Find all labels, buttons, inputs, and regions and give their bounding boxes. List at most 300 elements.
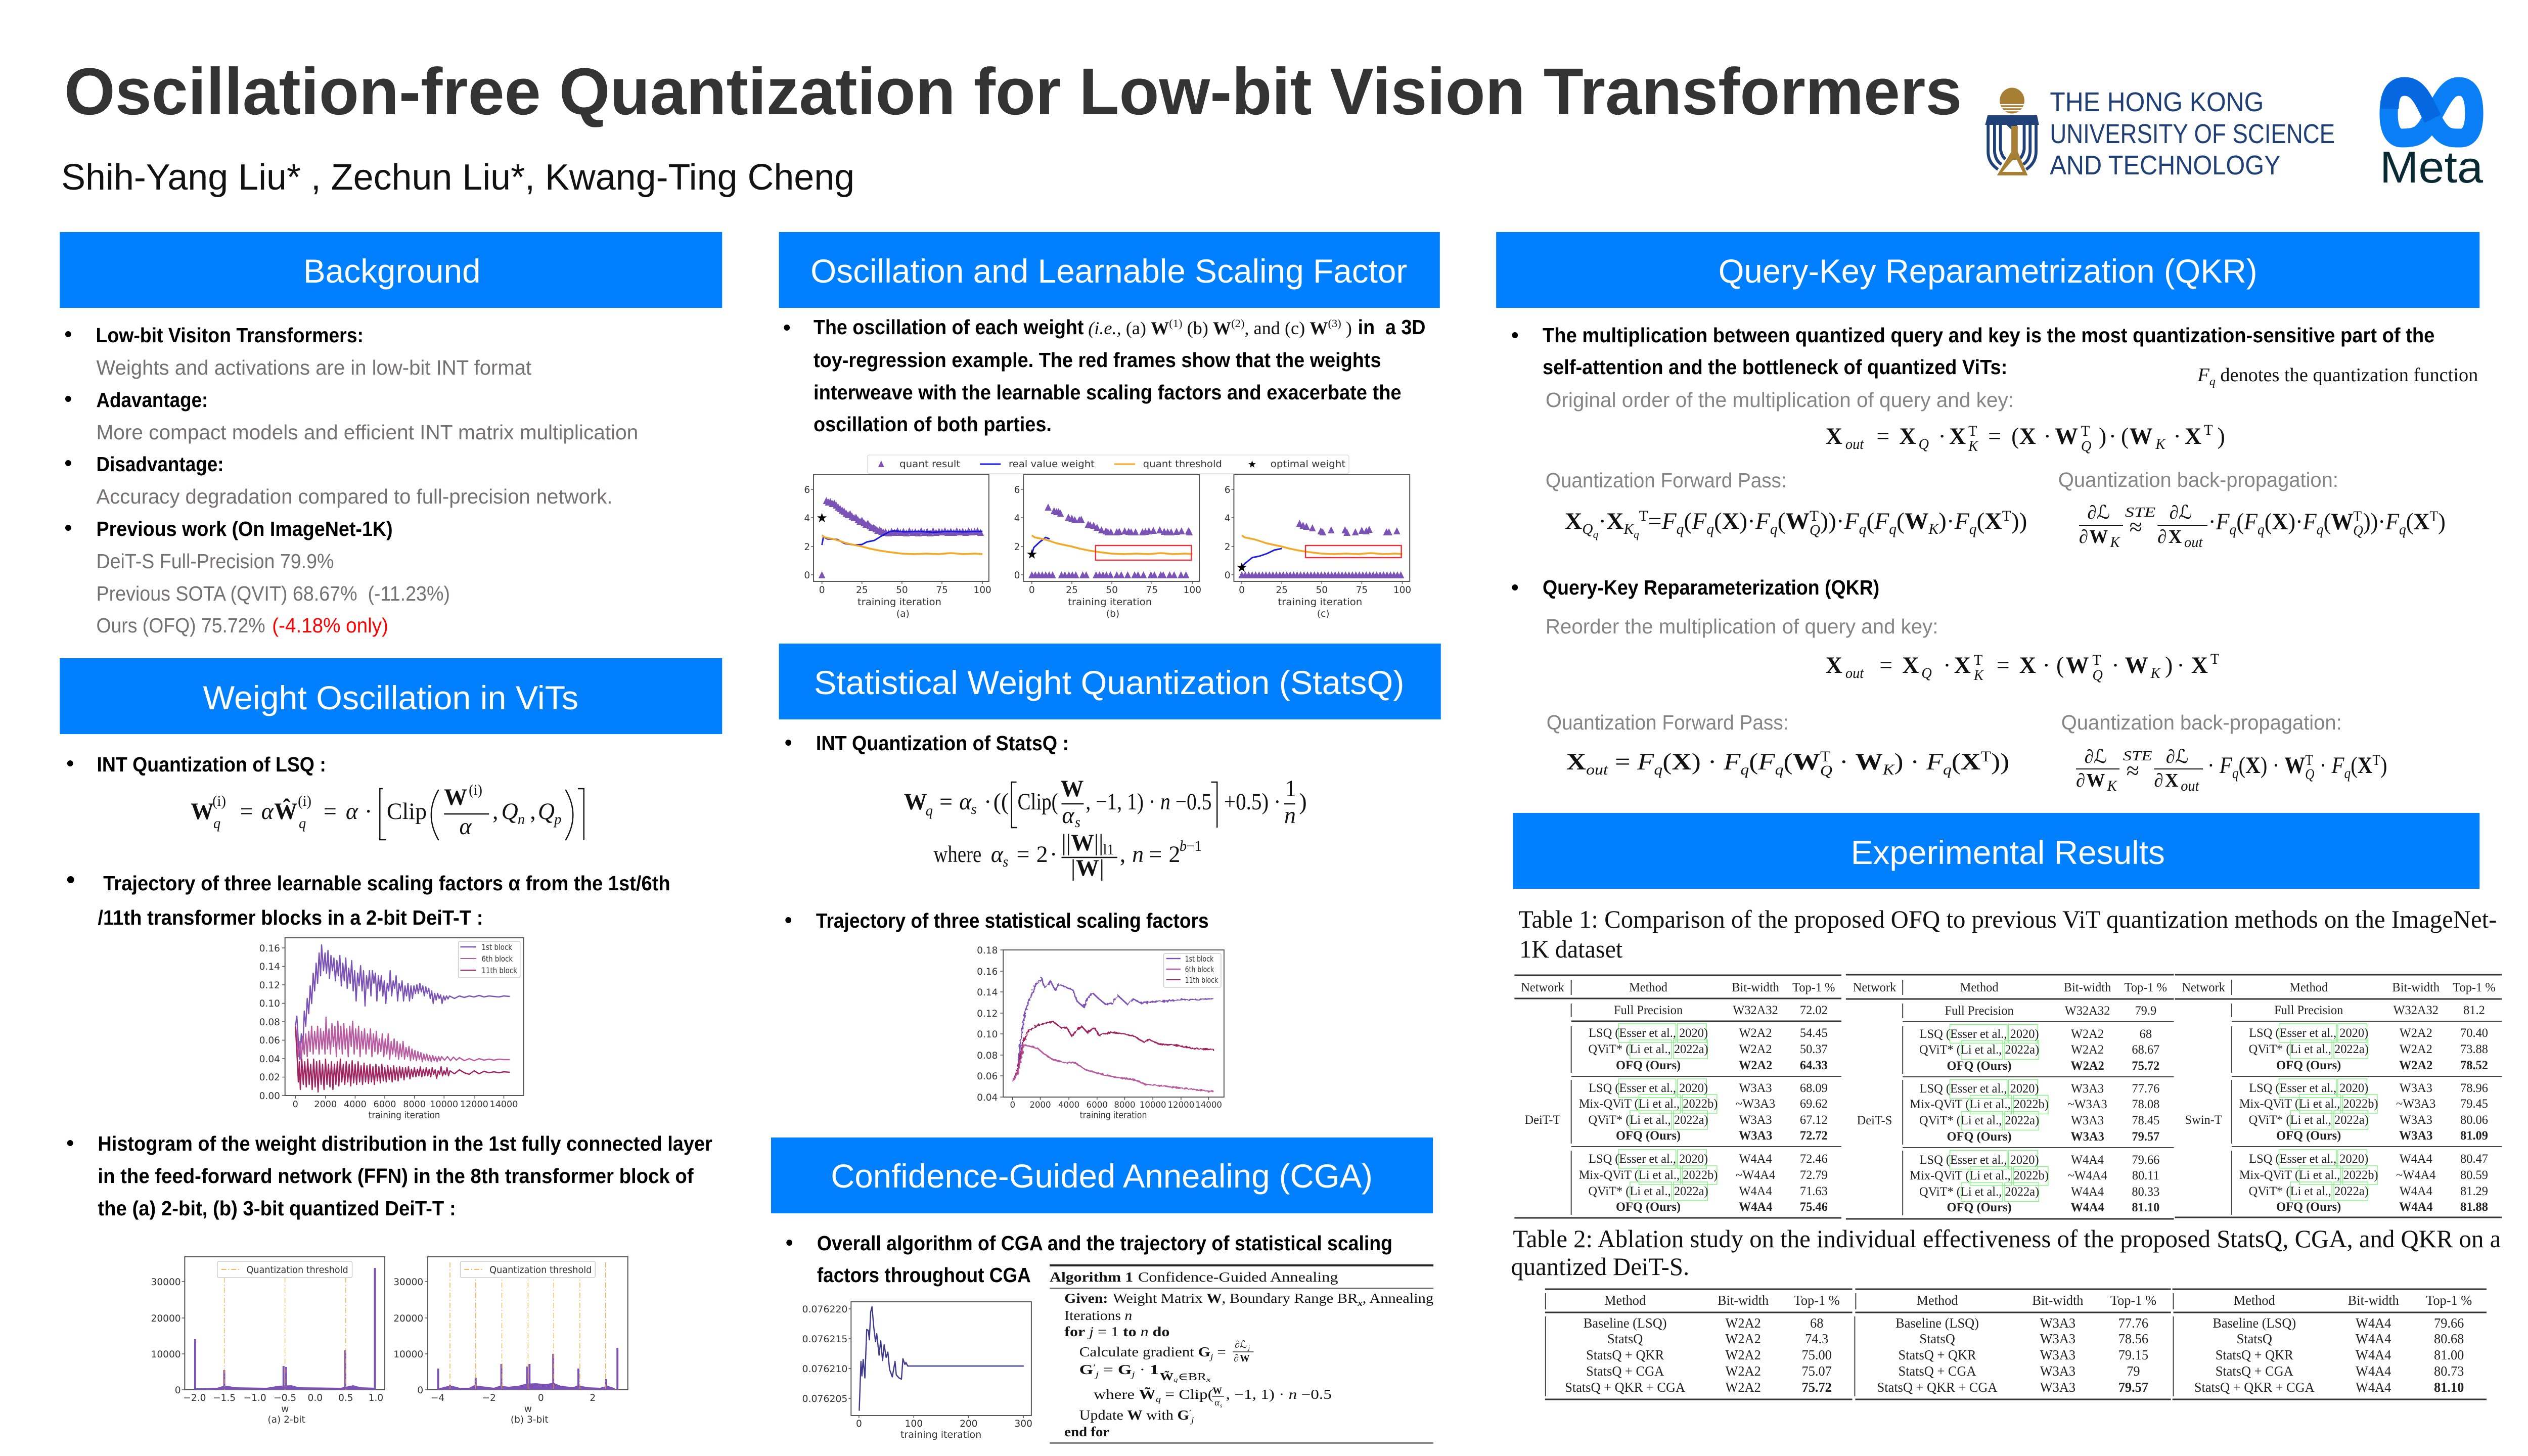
table 1: DeiT-T: Mix-QViT (Li et al., 2022b) (1579, 1168, 1718, 1182)
algorithm box: for j = 1 to n do (1064, 1324, 1169, 1339)
equation: LSQ quantization: p (553, 811, 561, 828)
histogram: 2-bit: −0.5 (274, 1393, 296, 1403)
histogram: 2-bit: 0 (175, 1385, 181, 1396)
heading (771, 1138, 1433, 1213)
line chart: learnable scaling factors: 4000 (344, 1099, 367, 1110)
table 2: 4-bit: StatsQ + CGA (2216, 1363, 2294, 1379)
equation: forward pass: F (1954, 509, 1969, 534)
bullet list (65, 324, 638, 637)
bullet text: ) (1341, 318, 1352, 338)
equation: reordered: W (2066, 653, 2089, 678)
equation: LSQ quantization: · (365, 799, 372, 825)
table 1 caption: Table 1: Comparison of the proposed OFQ to previous ViT quantization methods on the ImageNet- (1518, 905, 2497, 933)
panel: query-key reparametrization (1496, 232, 2479, 794)
table 1: DeiT-S: 78.08 (2132, 1098, 2159, 1111)
table 1: DeiT-S: LSQ (Esser et al., 2020) (1920, 1082, 2039, 1096)
legend: 6th block (1185, 965, 1214, 974)
line chart: CGA trajectory: 0.076210 (802, 1364, 847, 1375)
equation: reordered back-propagation: out (2181, 778, 2200, 794)
equation: reordered forward pass: q (1943, 762, 1952, 778)
table 1: DeiT-S: ~W3A3 (2067, 1098, 2107, 1111)
equation: forward pass: T (1810, 508, 1819, 524)
chart: toy regression (b): training iteration (1068, 597, 1152, 608)
legend: 11th block (482, 966, 518, 975)
chart: toy regression (b): ★ (1026, 547, 1037, 562)
equation: reordered back-propagation: ∂ (2076, 770, 2085, 791)
algorithm box: j (1247, 1344, 1250, 1351)
table 2: 4-bit: StatsQ (2237, 1331, 2272, 1346)
table 1: Swin-T: W32A32 (2393, 1004, 2439, 1017)
equation: reordered: X (2191, 653, 2208, 678)
equation: LSQ quantization: = (324, 799, 337, 825)
line chart: statistical scaling factors: 10000 (1140, 1100, 1166, 1110)
legend: toy regression: quant threshold (1143, 459, 1222, 470)
line chart: learnable scaling factors: 0.04 (259, 1054, 280, 1065)
equation: forward pass: X (1565, 509, 1582, 534)
table 1: Swin-T: 81.88 (2460, 1200, 2488, 1214)
table 1: Swin-T: QViT* (Li et al., 2022a) (2249, 1042, 2369, 1056)
equation: reordered: K (2150, 665, 2161, 681)
legend: toy regression: quant result (899, 459, 960, 470)
heading (60, 658, 722, 734)
equation: StatsQ: l1 (1103, 842, 1114, 858)
equation: reordered forward pass: q (1654, 762, 1662, 778)
algorithm box (1050, 1265, 1433, 1443)
equation: StatsQ: | (1071, 855, 1075, 881)
equation: reordered forward pass: ( (1749, 749, 1758, 775)
histogram: 3-bit: 2 (590, 1393, 596, 1403)
histogram: 2-bit: 30000 (151, 1277, 181, 1288)
chart: toy regression (c): 75 (1356, 585, 1368, 596)
line chart: CGA trajectory: 0 (856, 1419, 862, 1429)
line chart: learnable scaling factors: 0.08 (259, 1017, 280, 1028)
table 1: DeiT-S: W4A4 (2070, 1201, 2104, 1214)
equation: original order: · (2109, 424, 2116, 449)
equation: StatsQ: 1 (1285, 776, 1296, 802)
chart: toy regression (c): 2 (1225, 542, 1231, 553)
panel: background (60, 232, 722, 637)
table 1: Swin-T: OFQ (Ours) (2276, 1059, 2341, 1072)
chart: toy regression (c): 4 (1225, 513, 1231, 524)
algorithm box: q (1173, 1376, 1178, 1383)
table 1: DeiT-S: Bit-width (2064, 981, 2111, 994)
table 1: DeiT-S: Mix-QViT (Li et al., 2022b) (1910, 1098, 2049, 1111)
panel: weight oscillation (60, 658, 722, 1425)
equation: forward pass: ( (1684, 509, 1692, 534)
equation: back-propagation: W (2331, 509, 2353, 535)
algorithm box: Calculate gradient G (1079, 1344, 1208, 1359)
chart: toy regression (c): 0 (1239, 585, 1245, 596)
equation: reordered back-propagation: q (2232, 765, 2239, 782)
line chart: learnable scaling factors: 8000 (403, 1099, 426, 1110)
table 1: DeiT-T: QViT* (Li et al., 2022a) (1588, 1113, 1708, 1127)
table 1: Swin-T: QViT* (Li et al., 2022a) (2249, 1113, 2369, 1127)
text: back-propagation label: Quantization back-propagation: (2061, 711, 2342, 734)
algorithm box: 1 (1150, 1362, 1159, 1377)
table 1: Swin-T: Bit-width (2392, 981, 2440, 994)
equation: StatsQ: s (1075, 814, 1080, 831)
table 1: DeiT-T: OFQ (Ours) (1616, 1200, 1681, 1214)
equation: forward pass: q (1770, 521, 1778, 537)
equation: reordered back-propagation: ( (2351, 753, 2358, 779)
chart: toy regression (b): 0 (1014, 570, 1020, 581)
equation: LSQ quantization: = (240, 799, 253, 825)
line chart: statistical scaling factors: 0.14 (977, 987, 998, 998)
bullet list: Adavantage: (97, 388, 208, 412)
table 2: 2-bit: W2A2 (1725, 1363, 1761, 1379)
bullet text: multiplication (1512, 324, 2434, 379)
equation: forward pass: Q (1810, 522, 1820, 538)
table 2: 3-bit: StatsQ + QKR + CGA (1877, 1380, 1998, 1395)
equation: back-propagation: ≈ (2130, 515, 2142, 540)
table 2: 4-bit: 80.73 (2434, 1363, 2464, 1379)
equation: reordered forward pass: out (1586, 762, 1608, 778)
equation: reordered back-propagation: ) (2380, 753, 2387, 779)
equation: forward pass: F (1874, 509, 1889, 534)
equation: reordered back-propagation: W (2087, 770, 2105, 791)
equation: back-propagation: ·F (2208, 509, 2230, 535)
equation: original order: = (1876, 424, 1889, 449)
logo text: Meta (2380, 143, 2484, 192)
chart: toy regression (c): (c) (1317, 609, 1330, 619)
title: Oscillation-free Quantization for Low-bit Vision Transformers (64, 55, 1962, 128)
equation: reordered back-propagation: T (2372, 752, 2380, 768)
line chart: learnable scaling factors: 0.06 (259, 1035, 280, 1046)
equation: reordered forward pass: F (1637, 749, 1654, 775)
equation: reordered: · (1943, 653, 1951, 678)
equation: StatsQ: | (1100, 855, 1104, 881)
equation: reordered back-propagation: ∂ (2154, 770, 2163, 791)
table 1: DeiT-S: W4A4 (2071, 1185, 2104, 1199)
table 1: Swin-T: OFQ (Ours) (2276, 1129, 2341, 1143)
table 1: Swin-T (2175, 975, 2502, 1217)
line chart: statistical scaling factors: 0.12 (977, 1009, 998, 1019)
table 1: DeiT-S: W3A3 (2071, 1114, 2104, 1127)
equation: LSQ quantization: (i) (212, 793, 226, 809)
equation: reordered: ) (2165, 653, 2173, 678)
bullet: StatsQ: INT Quantization of StatsQ : (816, 732, 1069, 755)
bullet list: Disadvantage: (97, 452, 224, 476)
table 1: DeiT-T: OFQ (Ours) (1616, 1059, 1681, 1072)
line chart: learnable scaling factors (259, 938, 524, 1121)
table 2 caption (1511, 1224, 2501, 1281)
bullet text: multiplication: self-attention and the bottleneck of quantized ViTs: (1543, 355, 2007, 379)
bullet text: W (1310, 318, 1328, 338)
line chart: CGA trajectory: training iteration (900, 1430, 981, 1440)
bullet text (784, 315, 1425, 436)
table 1: DeiT-T: Network (1521, 981, 1564, 994)
table 1: DeiT-T: W32A32 (1733, 1004, 1778, 1017)
bullet text: oscillation of both parties. (814, 413, 1052, 436)
table 2: 3-bit: 77.76 (2118, 1315, 2148, 1331)
table 2: 3-bit: 79.57 (2118, 1380, 2148, 1395)
equation: forward pass: q (1706, 521, 1714, 537)
bullet: trajectory of learnable scaling factors: Trajectory of three learnable scaling factors α from the 1st/6th (103, 872, 670, 895)
histogram: 2-bit: −1.5 (213, 1393, 236, 1403)
chart: toy regression (a) (804, 475, 991, 619)
equation: forward pass: q (1889, 521, 1897, 537)
histogram: 3-bit: 30000 (393, 1277, 423, 1288)
equation: reordered: · (2177, 653, 2185, 678)
equation: back-propagation: STE (2125, 505, 2155, 520)
equation: reordered forward pass: X (1566, 749, 1586, 775)
equation: back-propagation: F (2385, 509, 2400, 535)
line chart: learnable scaling factors: 0.14 (259, 962, 280, 972)
bullet text: Overall algorithm of CGA and the trajectory of statistical scaling (817, 1232, 1392, 1255)
table 1: Swin-T: W3A3 (2400, 1113, 2432, 1127)
equation: back-propagation: ∂ℒ (2088, 503, 2110, 523)
table 2: 3-bit: Baseline (LSQ) (1895, 1315, 1979, 1331)
equation: reordered forward pass: T (1820, 749, 1831, 765)
equation: reordered back-propagation: X (2358, 753, 2372, 779)
equation: forward pass: q (1677, 521, 1684, 537)
legend: Quantization threshold (246, 1265, 348, 1276)
equation: reordered forward pass: = (1608, 749, 1637, 775)
panel: confidence-guided annealing (771, 1138, 1433, 1443)
equation: back-propagation (2079, 503, 2446, 551)
table 1: Swin-T: ~W3A3 (2396, 1097, 2435, 1111)
algorithm box: s (1220, 1402, 1223, 1409)
table 1: DeiT-S: LSQ (Esser et al., 2020) (1920, 1153, 2039, 1167)
equation: StatsQ: +0.5) · (1224, 789, 1281, 815)
chart: toy regression (c): 25 (1276, 585, 1288, 596)
table 1: Swin-T: ~W4A4 (2396, 1168, 2435, 1182)
equation: reordered: ( (2056, 653, 2064, 678)
table 2: 4-bit: StatsQ + QKR (2216, 1347, 2293, 1362)
table 1: DeiT-T: 50.37 (1800, 1042, 1828, 1056)
algorithm box: , Annealing (1363, 1291, 1433, 1306)
table 2: 2-bit: StatsQ + CGA (1586, 1363, 1664, 1379)
equation: LSQ quantization: W (444, 785, 467, 810)
histogram: 3-bit: −2 (482, 1393, 496, 1403)
algorithm box: x (1206, 1376, 1211, 1383)
table 2: 2-bit: StatsQ (1607, 1331, 1643, 1346)
equation: reordered back-propagation: · F (2207, 753, 2234, 779)
heading (60, 232, 722, 308)
table 2: 3-bit: W3A3 (2040, 1331, 2075, 1346)
table 2: 4-bit: 81.00 (2434, 1347, 2464, 1362)
bullet text: , and (c) (1244, 318, 1310, 338)
equation: back-propagation: K (2110, 534, 2120, 551)
equation: original order: W (2055, 424, 2078, 449)
line chart: learnable scaling factors: 0 (293, 1099, 298, 1110)
table 1: Swin-T: 80.47 (2460, 1152, 2488, 1166)
equation: reordered back-propagation: K (2107, 778, 2117, 794)
equation: reordered: · (2043, 653, 2050, 678)
equation: LSQ quantization: Ŵ (274, 798, 297, 825)
line chart: statistical scaling factors: 0.10 (977, 1029, 998, 1040)
table 1: Swin-T: Mix-QViT (Li et al., 2022b) (2239, 1097, 2378, 1111)
table 2: 2-bit: Baseline (LSQ) (1584, 1315, 1667, 1331)
line chart: learnable scaling factors: 6000 (374, 1099, 396, 1110)
equation: StatsQ: b (1180, 838, 1187, 854)
table 2: 4-bit: StatsQ + QKR + CGA (2194, 1380, 2315, 1395)
equation: reordered forward pass: ( (1952, 749, 1961, 775)
table 1: Swin-T: W4A4 (2400, 1152, 2432, 1166)
line chart: statistical scaling factors: 0.16 (977, 967, 998, 977)
table 1: DeiT-S: W4A4 (2071, 1153, 2104, 1167)
equation: reordered: X (2019, 653, 2036, 678)
bullet text: factors throughout CGA (817, 1263, 1031, 1287)
equation: original order: T (2081, 423, 2090, 439)
equation: reordered forward pass: F (1926, 749, 1944, 775)
table 1: DeiT-S: 80.11 (2132, 1169, 2159, 1182)
authors: Shih-Yang Liu* , Zechun Liu*, Kwang-Ting Cheng (61, 157, 854, 198)
algorithm box: G (1079, 1362, 1094, 1377)
equation: back-propagation: ∂ (2157, 527, 2166, 548)
line chart: statistical scaling factors: 4000 (1058, 1100, 1079, 1110)
histogram: 3-bit: 20000 (393, 1313, 423, 1324)
equation: forward pass: F (1661, 509, 1677, 534)
chart: toy regression (b): 100 (1184, 585, 1201, 596)
table 2: 4-bit: Method (2234, 1293, 2275, 1308)
equation: back-propagation: q (2317, 522, 2323, 538)
table 1: DeiT-T: 64.33 (1800, 1059, 1828, 1072)
bullet list: More compact models and efficient INT matrix multiplication (97, 421, 638, 444)
table 1: DeiT-S: W32A32 (2065, 1004, 2110, 1018)
bullet list: Previous SOTA (QVIT) 68.67% (-11.23%) (97, 582, 450, 605)
table 1: DeiT-T: 75.46 (1800, 1200, 1828, 1214)
equation: reordered back-propagation: ∂ℒ (2085, 747, 2107, 767)
equation: reordered back-propagation: Q (2305, 766, 2315, 783)
table 2: 3-bit: 78.56 (2118, 1331, 2148, 1346)
equation: forward pass: X (1606, 509, 1623, 534)
equation: reordered forward pass: X) · F (1672, 749, 1738, 775)
algorithm box: where W̃ (1094, 1387, 1152, 1402)
line chart: CGA trajectory: 200 (960, 1419, 977, 1429)
algorithm box: Algorithm 1 (1050, 1269, 1133, 1285)
table 1: Swin-T: W2A2 (2400, 1042, 2432, 1056)
equation: back-propagation: Q (2353, 523, 2363, 539)
table 2: 3-bit: W3A3 (2040, 1380, 2075, 1395)
equation: original order: Q (1918, 436, 1929, 452)
equation: LSQ quantization: α (346, 799, 359, 825)
equation: StatsQ: W (1076, 855, 1099, 881)
equation: StatsQ: · (984, 789, 991, 815)
table 2: 4-bit: W4A4 (2356, 1315, 2391, 1331)
table 1: DeiT-S: W3A3 (2070, 1130, 2104, 1144)
legend: toy regression: optimal weight (1271, 459, 1345, 470)
legend (217, 1261, 352, 1278)
algorithm box: j (1209, 1352, 1213, 1361)
line chart: learnable scaling factors: 0.02 (259, 1072, 280, 1083)
equation: back-propagation: ))· (2363, 509, 2385, 535)
bullet list: Previous work (On ImageNet-1K) (97, 517, 393, 540)
table 1: Swin-T: 70.40 (2460, 1026, 2488, 1040)
chart: toy regression (a): 0 (804, 570, 810, 581)
table 1: DeiT-S: Mix-QViT (Li et al., 2022b) (1910, 1169, 2049, 1182)
table 1: DeiT-T: LSQ (Esser et al., 2020) (1589, 1152, 1708, 1166)
table 1: DeiT-T: Mix-QViT (Li et al., 2022b) (1579, 1097, 1718, 1111)
equation: back-propagation: ( (2323, 509, 2331, 535)
table 1: DeiT-S: 68.67 (2132, 1043, 2159, 1057)
algorithm box: = (1099, 1362, 1118, 1377)
heading: Confidence-Guided Annealing (CGA) (831, 1157, 1373, 1195)
equation: forward pass: )· (1938, 509, 1955, 534)
bullet list: Weights and activations are in low-bit INT format (97, 356, 531, 379)
line chart: statistical scaling factors: 0 (1010, 1100, 1015, 1110)
table 2: 2-bit: 68 (1810, 1315, 1823, 1331)
bullet text: (1) (1169, 317, 1183, 330)
equation: back-propagation: W (2089, 527, 2108, 548)
histogram: 3-bit: −4 (431, 1393, 444, 1403)
equation: forward pass: ( (1977, 509, 1984, 534)
table 2: 3-bit: StatsQ (1919, 1331, 1955, 1346)
text: forward pass label: Quantization Forward Pass: (1547, 711, 1789, 734)
equation: forward pass: T (1639, 508, 1648, 524)
table 2: 4-bit: W4A4 (2356, 1331, 2391, 1346)
equation: reordered: Q (1921, 665, 1932, 681)
equation: StatsQ: , (1120, 842, 1125, 868)
table 2: 2-bit: W2A2 (1725, 1331, 1761, 1346)
equation: StatsQ: || (1061, 830, 1071, 856)
algorithm box: j (1131, 1370, 1135, 1379)
equation: reordered back-propagation (2076, 747, 2387, 794)
equation: reordered back-propagation: T (2305, 752, 2313, 768)
equation: forward pass: = (1648, 509, 1662, 534)
bullet list: DeiT-S Full-Precision 79.9% (97, 550, 334, 573)
bullet list: Ours (OFQ) 75.72% (97, 614, 265, 637)
chart: toy regression (c): 6 (1225, 485, 1231, 495)
chart: toy regression (c): 100 (1393, 585, 1411, 596)
histogram: 3-bit: 0 (417, 1385, 423, 1396)
table 1: Swin-T: 80.59 (2460, 1168, 2488, 1182)
equation: StatsQ: α (991, 842, 1004, 868)
line chart: CGA trajectory: 0.076220 (802, 1304, 847, 1315)
equation: forward pass: W (1786, 509, 1810, 534)
table 2: 2-bit: StatsQ + QKR + CGA (1565, 1380, 1686, 1395)
equation: reordered: · (2111, 653, 2119, 678)
table 2: 2-bit: 74.3 (1805, 1331, 1828, 1346)
table 2: 2-bit: 75.72 (1802, 1380, 1832, 1395)
table 1: DeiT-T: QViT* (Li et al., 2022a) (1588, 1042, 1708, 1056)
bullet text: (b) (1183, 318, 1213, 338)
equation: original order: X (1826, 424, 1842, 449)
table 1: DeiT-S: 77.76 (2132, 1082, 2159, 1096)
table 1: DeiT-T: 71.63 (1800, 1185, 1828, 1198)
table 1: DeiT-T: LSQ (Esser et al., 2020) (1589, 1081, 1708, 1095)
table 2: 4-bit: W4A4 (2356, 1363, 2391, 1379)
logo text (2050, 87, 2335, 180)
algorithm box: j (1094, 1370, 1099, 1379)
table 1: Swin-T: 81.29 (2460, 1185, 2488, 1198)
table 1: Swin-T: Top-1 % (2453, 981, 2496, 994)
logo text: UNIVERSITY OF SCIENCE (2050, 119, 2335, 149)
line chart: statistical scaling factors: 0.04 (977, 1093, 998, 1103)
table 2: 2-bit: W2A2 (1725, 1315, 1761, 1331)
table 1: DeiT-S: 78.45 (2132, 1114, 2159, 1127)
table 2: 4-bit (2173, 1289, 2487, 1399)
chart: toy regression (b) (1014, 475, 1201, 619)
table 2 caption: quantized DeiT-S. (1511, 1252, 1689, 1281)
algorithm box: x (1357, 1298, 1363, 1308)
equation: reordered: T (2092, 652, 2101, 668)
bullet: trajectory of learnable scaling factors: /11th transformer blocks in a 2-bit DeiT-T : (98, 906, 483, 929)
equation: original order: ( (2121, 424, 2129, 449)
equation: reordered back-propagation: · (2314, 753, 2332, 779)
logo: Meta (2380, 86, 2484, 192)
equation: reordered forward pass: T (1980, 749, 1991, 765)
text: reorder: Reorder the multiplication of query and key: (1546, 615, 1938, 638)
equation: reordered forward pass: · (1832, 749, 1855, 775)
table 1: DeiT-T: Full Precision (1614, 1004, 1683, 1017)
algorithm box: ′ (1189, 1408, 1191, 1418)
table 1: DeiT-S: DeiT-S (1857, 1114, 1892, 1127)
equation: reordered back-propagation: X) · W (2245, 753, 2308, 779)
equation: LSQ quantization: α (460, 814, 472, 840)
legend: toy regression: real value weight (1009, 459, 1095, 470)
equation: StatsQ: (( (994, 789, 1009, 815)
